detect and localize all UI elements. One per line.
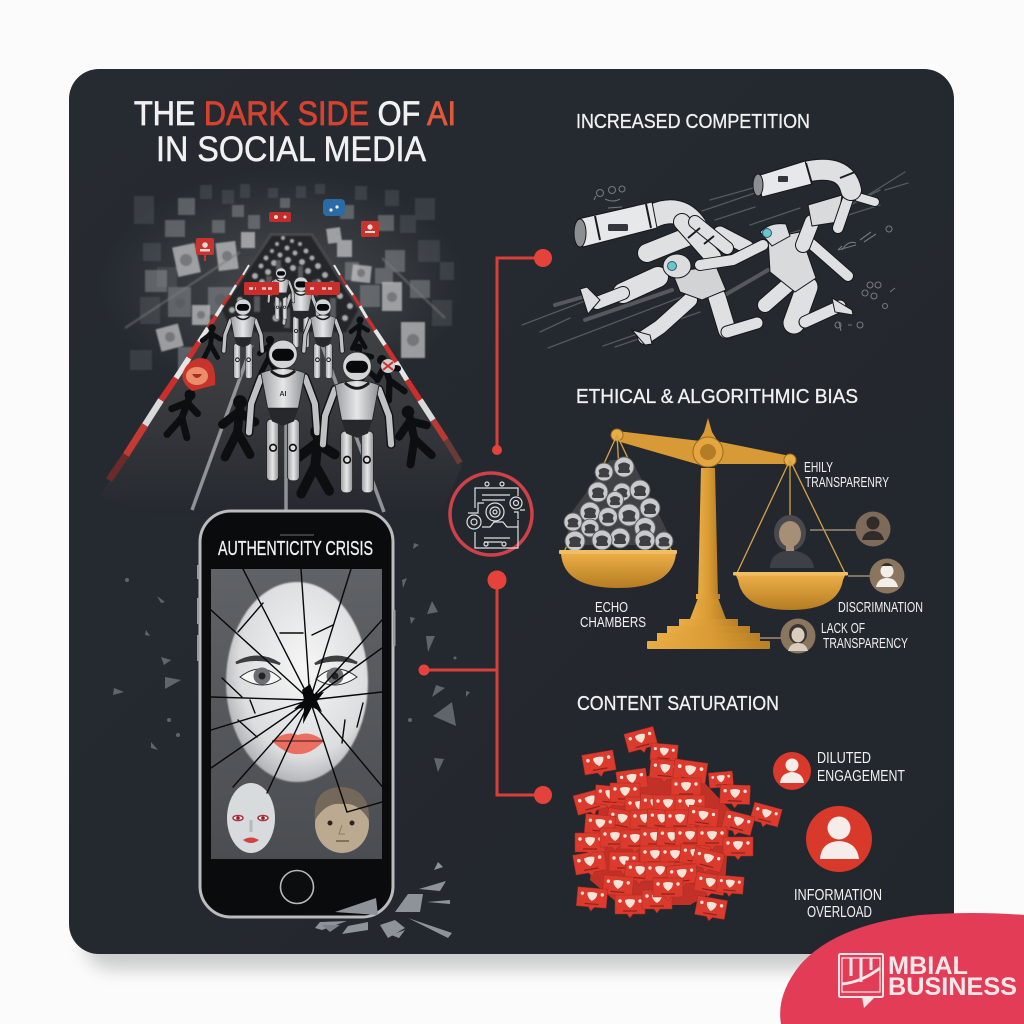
person on right pan [770, 515, 814, 568]
label: information overload [794, 887, 882, 921]
small human face [315, 787, 369, 853]
left barrier [109, 265, 249, 480]
robot left [574, 202, 757, 345]
heading: increased competition: INCREASED COMPETITION [576, 111, 810, 133]
label: ehily transparenry: TRANSPARENRY [805, 475, 889, 491]
logo: mbial business badge [780, 913, 1024, 1024]
illustration: pile of like notifications [573, 726, 782, 923]
main face [226, 582, 368, 782]
labels: echo chambers [580, 600, 646, 631]
logo text: BUSINESS [888, 973, 1017, 1001]
phone body [200, 511, 393, 917]
label: discrimination: DISCRIMNATION [838, 600, 923, 616]
label: information overload: OVERLOAD [807, 904, 872, 921]
label: diluted engagement: ENGAGEMENT [817, 768, 905, 785]
connector: red circuit lines [418, 249, 552, 804]
label: diluted engagement: DILUTED [817, 750, 871, 767]
illustration: crashing robots [522, 161, 908, 348]
ambient glow [100, 170, 470, 400]
lane lines [192, 345, 384, 512]
label: diluted engagement [817, 750, 905, 785]
AI chest label: AI [280, 391, 287, 398]
small AI face [227, 783, 275, 853]
distant crowd [222, 236, 358, 332]
avatar: lack of transparency [780, 618, 816, 654]
dark fallen figures [202, 324, 220, 359]
red banners [244, 282, 279, 295]
logo text [888, 952, 1017, 1001]
base [647, 468, 770, 649]
label: lack of transparency [821, 621, 908, 652]
title: IN SOCIAL MEDIA [156, 130, 427, 169]
beam [617, 431, 700, 465]
avatar links [760, 530, 875, 638]
right pan [735, 573, 846, 610]
logo icon [839, 954, 883, 1008]
panel: dark card [69, 69, 954, 954]
avatar: discrimination top [856, 512, 890, 546]
speed lines [522, 172, 908, 348]
title: THE DARK SIDE OF AI [134, 95, 456, 133]
title [134, 95, 456, 169]
right barrier [334, 265, 460, 463]
labels: echo chambers: ECHO [595, 600, 628, 616]
label: lack of transparency: LACK OF [821, 621, 865, 637]
front robots [249, 340, 317, 481]
home button [280, 870, 314, 904]
mid distance robots [284, 277, 318, 347]
illustration: golden scales [559, 418, 923, 654]
icon: information overload avatar [806, 806, 872, 872]
panel shadow [84, 90, 939, 970]
glass shards around phone [113, 543, 470, 772]
broken glass pile [315, 862, 452, 938]
cracked glass [211, 569, 385, 812]
social media tile wall [130, 184, 454, 370]
labels: echo chambers: CHAMBERS [580, 615, 646, 631]
pile of faces [564, 457, 674, 551]
right pan cords [737, 460, 845, 573]
phone screen [211, 569, 382, 859]
mid robots [224, 299, 262, 378]
icon: central AI circuit badge [450, 473, 532, 555]
label: ehily transparenry: EHILY [804, 460, 833, 476]
left pan cords [564, 435, 672, 552]
label: ehily transparenry [804, 460, 889, 491]
light beams [125, 252, 445, 328]
road [100, 233, 462, 515]
heading: content saturation: CONTENT SATURATION [577, 693, 779, 715]
logo text: MBIAL [888, 952, 968, 980]
label: lack of transparency: TRANSPARENCY [823, 636, 908, 652]
heading: ethical and algorithmic bias: ETHICAL & ALGORITHMIC BIAS [576, 386, 858, 408]
illustration: authenticity crisis phone [113, 511, 470, 938]
label: information overload: INFORMATION [794, 887, 882, 904]
icon: diluted engagement avatar [773, 752, 811, 790]
avatar: discrimination bottom [870, 558, 904, 594]
left pan [560, 551, 676, 588]
data scribbles [594, 186, 895, 331]
phone heading: AUTHENTICITY CRISIS [218, 538, 373, 560]
robot right [700, 161, 875, 323]
red and blue floating icons [182, 199, 395, 391]
illustration: robots marching down road [100, 170, 470, 515]
